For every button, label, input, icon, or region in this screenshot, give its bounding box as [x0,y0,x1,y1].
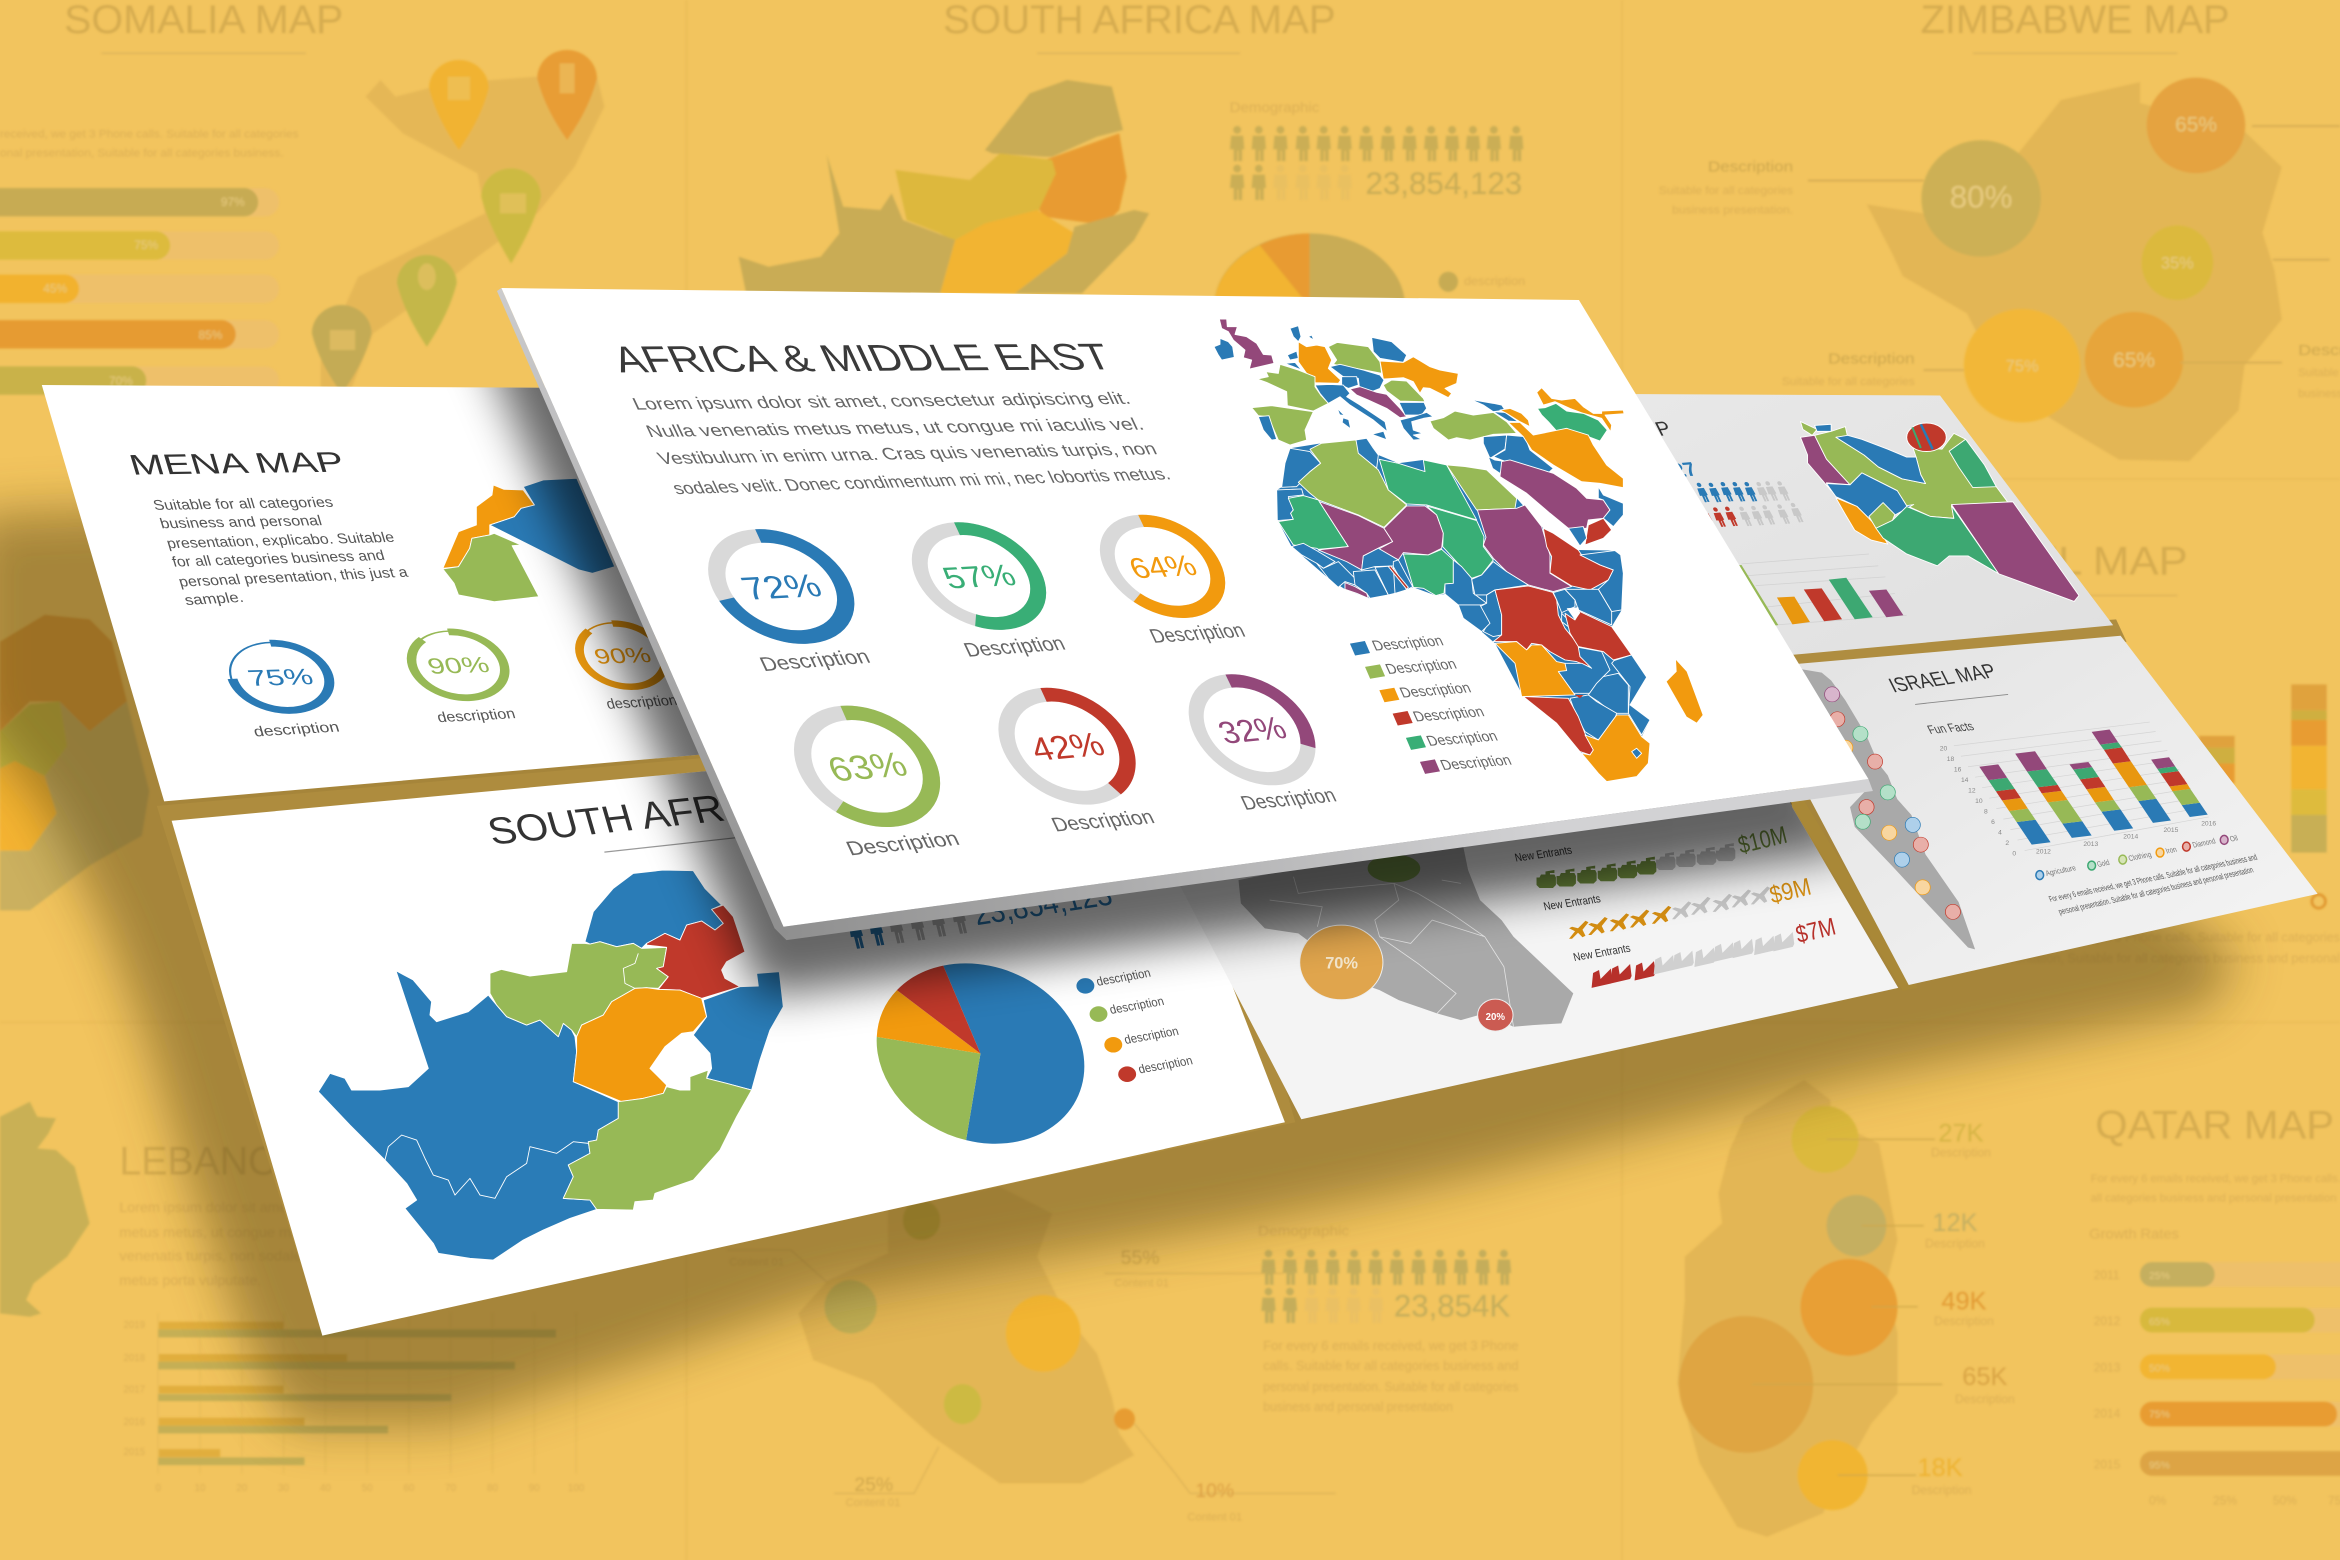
Africa and Arabia [1277,438,1703,782]
donut labels: Description [1048,806,1158,836]
chart axis labels: 0 [2012,851,2016,858]
population number fragment: 027 [1658,458,1701,483]
chart label: Fun Facts [1925,720,1976,737]
progress bars: 97% [221,195,245,209]
amounts [1736,822,1839,949]
bubbles: 80% [1950,179,2012,214]
amounts: $10M [1736,822,1790,859]
map legend: Description [1383,657,1459,678]
body text: onal presentation, Suitable for all categories business. [0,148,284,160]
gold gap upper right [1776,619,2127,675]
chart axis labels: 2 [2005,840,2009,847]
map [1800,421,2079,601]
body text: personal presentation. Suitable for all categories [1263,1380,1518,1394]
chart axis labels: 2012 [2036,849,2051,856]
growth bars: 0% [2149,1493,2167,1507]
map heading: MAP [1622,417,1675,444]
donut 64%: 64% [1123,549,1202,585]
growth bars: 25% [2213,1493,2237,1507]
donut 75% [221,641,340,712]
slide: top right map [1621,394,2113,655]
map legend: Description [1424,729,1500,750]
donut 57% [902,526,1056,626]
chart axis labels: 2019 [124,1320,145,1331]
bubbles: 75% [2006,358,2039,376]
heading: Israel: ISRAEL MAP [1927,539,2188,584]
title: MENA MAP [125,447,348,481]
ghost panel: demographic lower [1258,1224,1518,1414]
population number: 23,854K [1394,1288,1510,1323]
growth bars: 2015 [2094,1457,2121,1471]
amounts: $7M [1793,913,1839,949]
gold gap between slides [1783,791,1918,991]
ghost panel: South Africa map [739,0,1525,380]
paragraph: sample. [183,590,246,609]
demographic label: Demographic [1230,100,1320,115]
chart axis labels: 20 [1940,746,1947,753]
chart legend: Gold [2096,858,2111,869]
shadow cast by main slide [475,325,1858,997]
body text: calls. Suitable for all categories business and [1263,1359,1518,1373]
paragraph: sodales velit. Donec condimentum mi mi, nec lobortis metus. [669,464,1174,498]
donut 90% green: 90% [424,652,492,679]
body text: metus metus, ut congue mi iaculis vel. [119,1225,366,1240]
chart axis labels: 10 [195,1483,206,1494]
growth bars: 50% [2273,1493,2297,1507]
body text: Growth Rates [2089,1227,2179,1242]
paragraph: Lorem ipsum dolor sit amet, consectetur adipiscing elit. [629,389,1133,413]
bubbles: 65% [2113,349,2155,372]
chart axis labels: 2013 [2083,841,2099,848]
slide: Israel map [1761,636,2318,985]
chart axis labels: 90 [529,1483,540,1494]
ghost panel: Zimbabwe map [1659,0,2340,461]
icon row: tanks [1537,843,1735,888]
body text: all categories business and personal presentation [2091,1192,2336,1204]
chart axis labels: 2017 [124,1384,145,1395]
pie legend: description [1108,994,1166,1017]
South Africa ghost map [739,80,1149,293]
title underline [604,827,836,852]
chart axis labels: 8 [1984,809,1988,816]
chart legend [2036,833,2239,880]
map legend: Description [1398,681,1474,701]
callout text: Suitable for all categories [1782,376,1915,388]
Africa, Middle East and Europe map [1214,319,1703,782]
bottom map labels: Content 01 [846,1497,900,1509]
growth bars: 50% [2149,1363,2170,1374]
body text [2089,1173,2340,1242]
slide surface [501,288,1868,927]
callout text: Suitable for all categories [1659,185,1793,197]
ghost panel: bottom centre map [728,1187,1336,1524]
chart axis labels: 50 [362,1483,373,1494]
progress bars: 75% [134,238,159,252]
chart axis labels: 2016 [124,1417,145,1428]
chart axis labels: 4 [1998,830,2002,837]
legend dot [2312,895,2325,908]
body text: received, we get 3 Phone calls. Suitable for all categories [0,128,299,140]
chart axis labels: 16 [1954,767,1962,774]
donut 42%: 42% [1024,726,1111,768]
chart axis labels: 70 [445,1483,457,1494]
slide surface [1761,636,2318,985]
donut 42% [988,690,1146,802]
paragraph [2047,852,2259,917]
donut 90% orange [569,622,675,689]
donut 32% [1178,676,1326,783]
paragraph: for all categories business and [170,548,387,571]
growth bars: 65% [2149,1317,2170,1328]
donut labels: description [435,706,518,726]
chart legend: Iron [2164,845,2178,856]
body text: business and personal presentation [1263,1400,1453,1414]
progress bars: 45% [43,282,68,296]
Israel map and pins [1798,669,1975,949]
drop shadow under slides [0,500,2239,1425]
underline [101,53,306,54]
callout text: business presentation. [1672,204,1793,216]
slide surface [1180,672,1898,1119]
ghost pie chart [1214,233,1458,380]
icon row: ships [1592,932,1794,988]
chart axis labels: 60 [404,1483,415,1494]
people row 2 [1699,503,1805,528]
chart legend: Diamond [2191,837,2217,850]
donut labels [756,619,1340,860]
chart axis labels: 14 [1961,777,1969,784]
chart axis labels: 30 [278,1483,290,1494]
population number: 23,854,123 [1365,166,1522,201]
body text [1991,931,2340,966]
body text [119,1200,374,1288]
body text: presentation, Suitable for all categories business and personal [1991,952,2340,966]
solid gold gaps [157,716,1295,1333]
icon row: planes [1569,886,1770,939]
growth bars: 2012 [2094,1314,2121,1328]
chart axis labels: 18 [1947,756,1954,763]
bubble labels: 65K [1962,1363,2007,1391]
Europe and Near East [1214,319,1624,488]
Somalia map shape and pins [312,50,604,400]
pie chart [853,953,1108,1154]
donut 90% green [401,630,515,700]
row labels: New Entrants [1514,845,1574,865]
right callout text [2298,342,2340,400]
bottom map labels: 10% [1195,1480,1234,1502]
pie legend text: description [1464,274,1525,288]
slide thickness [497,288,1873,940]
heading: Lebanon: LEBANON MAP [119,1138,403,1183]
bubble labels: 12K [1932,1209,1978,1237]
population number: 23,854,123 [968,876,1116,932]
body text: venenatis turpis, non sodales velit. [119,1248,343,1263]
progress bars [0,188,279,395]
people pictogram [1230,126,1523,200]
chart axis labels: 100 [568,1483,585,1494]
main slide: Africa and Middle East [497,288,1873,940]
body text: metus porta vulputate. [119,1273,261,1288]
slide: MENA map [42,385,746,801]
donut 72%: 72% [736,567,827,607]
title: AFRICA & MIDDLE EAST [605,336,1119,381]
pie legend: description [1122,1024,1180,1047]
bubbles: 65% [2175,113,2217,136]
growth bars: 95% [2149,1460,2170,1471]
paragraph: personal presentation, this just a [177,565,411,591]
bubble descriptions: Description [1934,1314,1994,1328]
donut 32%: 32% [1212,710,1292,750]
Qatar map and bubbles [1677,1080,1942,1537]
chart axis labels: 0 [155,1483,161,1494]
title: ISRAEL MAP [1885,660,2000,697]
chart axis labels: 2015 [2163,827,2179,834]
callout text: Description [1708,159,1793,176]
ghost panel: Lebanon map [0,1102,585,1494]
title underline [1915,694,2008,704]
slide surface [1621,394,2113,655]
body text: For every 6 emails received, we get 3 Phone [1263,1339,1518,1353]
paragraph: Vestibulum in enim urna. Cras quis venenatis turpis, non [654,439,1160,468]
bar chart [158,1313,576,1473]
map legend [1350,634,1514,774]
bar 2015 [2092,730,2171,823]
donut 57%: 57% [938,559,1022,596]
callout lines [1808,126,2340,370]
chart axis labels [124,1320,585,1494]
chart legend: Clothing [2127,850,2153,863]
donut 72% [698,533,864,640]
ghost panel: Israel map [1927,539,2340,966]
bottom map labels: Content 01 [729,1257,784,1269]
bubble labels [1917,1120,2007,1482]
body text: Lorem ipsum dolor sit amet, consectetur [119,1200,374,1215]
chart legend: Agriculture [2044,863,2077,878]
bottom map labels: Content 01 [1187,1512,1242,1524]
row labels [1514,845,1632,964]
donut labels: description [252,720,341,740]
bubble labels: 49K [1941,1288,1987,1316]
progress bars: 85% [198,328,223,342]
row labels: New Entrants [1572,943,1632,964]
people pictogram [1261,1250,1511,1323]
underline [1037,53,1240,54]
bubble percent labels: 20% [1486,1012,1505,1023]
pie legend [1076,966,1194,1082]
amounts: $9M [1767,874,1814,909]
pie legend: description [1095,966,1153,989]
heading: Qatar: QATAR MAP [2095,1103,2334,1148]
body text [1263,1339,1518,1414]
slide: new entrants map [1180,672,1898,1119]
growth bars [2094,1262,2340,1507]
donut labels: Description [1237,784,1340,815]
bubble descriptions: Description [1955,1392,2015,1406]
chart axis labels: 2016 [2201,820,2216,827]
donut labels: Description [842,828,963,860]
chart axis labels: 12 [1968,787,1976,794]
bubble labels: 18K [1917,1454,1963,1482]
slide surface [42,385,746,801]
bottom map labels: 25% [854,1474,893,1496]
donut 75%: 75% [245,664,316,691]
paragraph: Nulla venenatis metus metus, ut congue mi iaculis vel. [642,414,1147,441]
row labels: New Entrants [1542,893,1602,913]
bar chart [1730,554,1907,627]
progress bars: 70% [109,374,133,388]
growth bars: 2013 [2094,1360,2121,1374]
underline [1973,53,2177,54]
chart legend: Oil [2228,833,2239,844]
slide: South Africa map [172,731,1285,1336]
grey map [1238,847,1573,1031]
bottom map labels [729,1247,1242,1524]
slide surface [172,731,1285,1336]
chart axis labels: 20 [236,1483,248,1494]
people pictogram [845,898,969,949]
chart axis labels: 80 [487,1483,498,1494]
bubble labels: 27K [1938,1120,1984,1148]
donut labels: Description [756,645,874,676]
growth bars: 2011 [2094,1268,2120,1282]
donut 90% orange: 90% [591,644,654,669]
map legend: Description [1411,705,1487,725]
chart axis labels: 2018 [124,1353,145,1364]
bubble descriptions: Description [1912,1483,1971,1497]
chart axis labels: 40 [320,1483,331,1494]
bubble descriptions: Description [1925,1237,1985,1251]
chart axis labels: 10 [1975,798,1983,805]
bar 2016 [2151,757,2208,817]
donut labels: Description [1146,619,1249,648]
Lebanon ghost map [0,1102,90,1317]
bubble descriptions [1912,1146,2015,1497]
people row 1 [1682,481,1791,502]
chart axis labels: 2014 [2123,834,2138,841]
donut labels [252,693,679,740]
body text: we get 3 Phone calls. Suitable for all categories [2073,931,2340,945]
chart axis labels: 2015 [124,1447,145,1458]
chart axis labels [1940,746,2216,858]
body text [0,128,299,160]
donut labels: Description [960,632,1069,662]
MENA map [443,478,615,602]
ghost panel: Qatar map [1677,1080,2340,1537]
bubble descriptions: Description [1931,1146,1991,1160]
paragraph: Suitable for all categories [151,495,335,514]
callout text: Description [1828,350,1915,367]
Zimbabwe map shape [1867,82,2282,461]
donut 63%: 63% [821,745,913,789]
map legend: Description [1370,634,1446,654]
chart axis labels: 6 [1991,819,1995,826]
map legend: Description [1438,753,1514,774]
bottom map labels: Content 01 [1114,1277,1169,1289]
bar 2013 [2015,751,2092,838]
ghost panel: left coloured map [0,615,149,910]
fun facts label: Fun Facts [1968,635,2055,657]
callout text [1659,159,1915,388]
bottom map labels: 55% [1121,1247,1160,1269]
donut 63% [784,708,951,825]
title: SOUTH AFRICA MAP [483,770,895,853]
bubbles: 35% [2161,255,2194,273]
bubble percent labels [1325,955,1505,1023]
paragraph: business and personal [158,513,324,532]
growth bars: 25% [2149,1271,2170,1282]
underline [1985,595,2177,596]
pie legend: description [1137,1053,1194,1076]
stacked bars [2199,684,2327,853]
ghost panel: Somalia map [0,0,604,400]
donut labels: description [604,693,679,713]
paragraph: presentation, explicabo. Suitable [165,530,396,552]
paragraph [151,495,411,609]
growth bars: 75% [2149,1410,2170,1421]
bubble percent labels: 70% [1325,955,1358,973]
growth bars: 2014 [2094,1407,2121,1421]
bar 2012 [1979,764,2051,845]
South Africa map [318,870,783,1260]
bubbles [1921,78,2245,422]
demographic label: Demographic [1258,1224,1349,1239]
paragraph [629,389,1174,498]
donut 64% [1090,518,1235,615]
stacked bar chart [1954,722,2209,851]
bar 2014 [2069,762,2133,831]
